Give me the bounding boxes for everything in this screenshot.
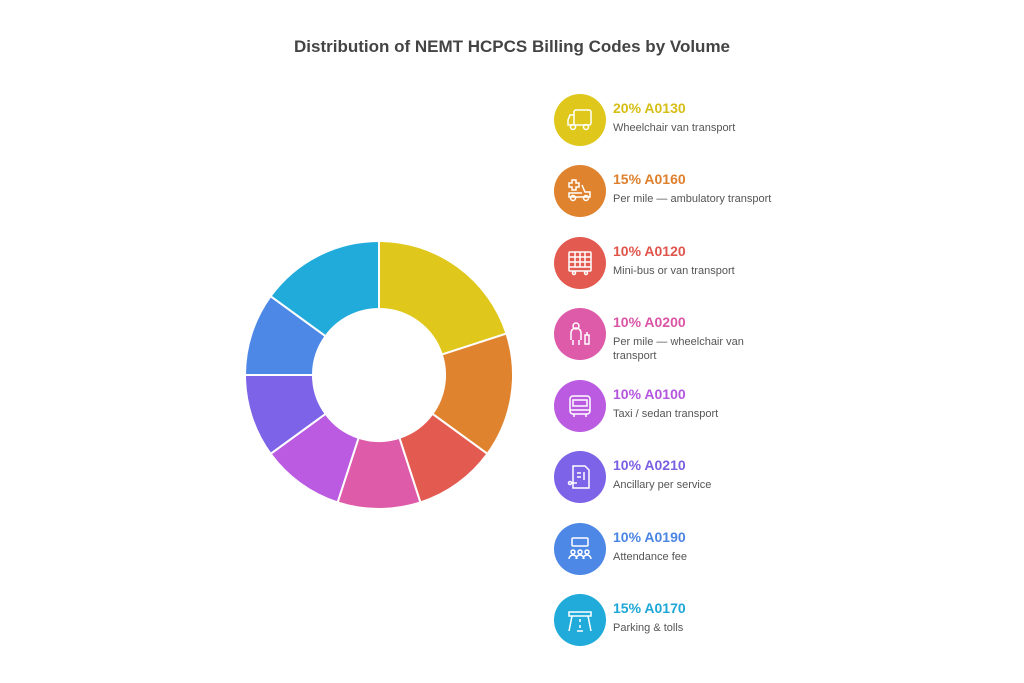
legend item: A0210: 10% A0210 — [613, 457, 686, 473]
legend item: A0160 — [554, 165, 772, 217]
legend item: A0200 — [554, 308, 744, 362]
legend item: A0100 — [554, 380, 718, 432]
title: Distribution of NEMT HCPCS Billing Codes by Volume — [294, 37, 730, 56]
legend item: A0120 — [554, 237, 735, 289]
legend item: A0210: Ancillary per service — [613, 479, 711, 491]
legend item: A0160: 15% A0160 — [613, 171, 686, 187]
legend item: A0210 — [554, 451, 711, 503]
legend item: A0130: Wheelchair van transport — [613, 122, 735, 134]
legend item: A0190: Attendance fee — [613, 551, 687, 563]
legend item: A0120: 10% A0120 — [613, 243, 686, 259]
legend item: A0100: 10% A0100 — [613, 386, 686, 402]
legend item: A0190: 10% A0190 — [613, 529, 686, 545]
legend item: A0160: Per mile — ambulatory transport — [613, 193, 771, 205]
legend item: A0170: Parking & tolls — [613, 622, 683, 634]
legend item: A0130: 20% A0130 — [613, 100, 686, 116]
legend item: A0170 — [554, 594, 686, 646]
legend item: A0130 — [554, 94, 736, 146]
legend item: A0200: 10% A0200 — [613, 314, 686, 330]
legend item: A0190 — [554, 523, 687, 575]
legend item: A0200: Per mile — wheelchair van transport — [613, 336, 744, 362]
legend item: A0170: 15% A0170 — [613, 600, 686, 616]
legend item: A0120: Mini-bus or van transport — [613, 265, 735, 277]
legend item: A0100: Taxi / sedan transport — [613, 408, 718, 420]
